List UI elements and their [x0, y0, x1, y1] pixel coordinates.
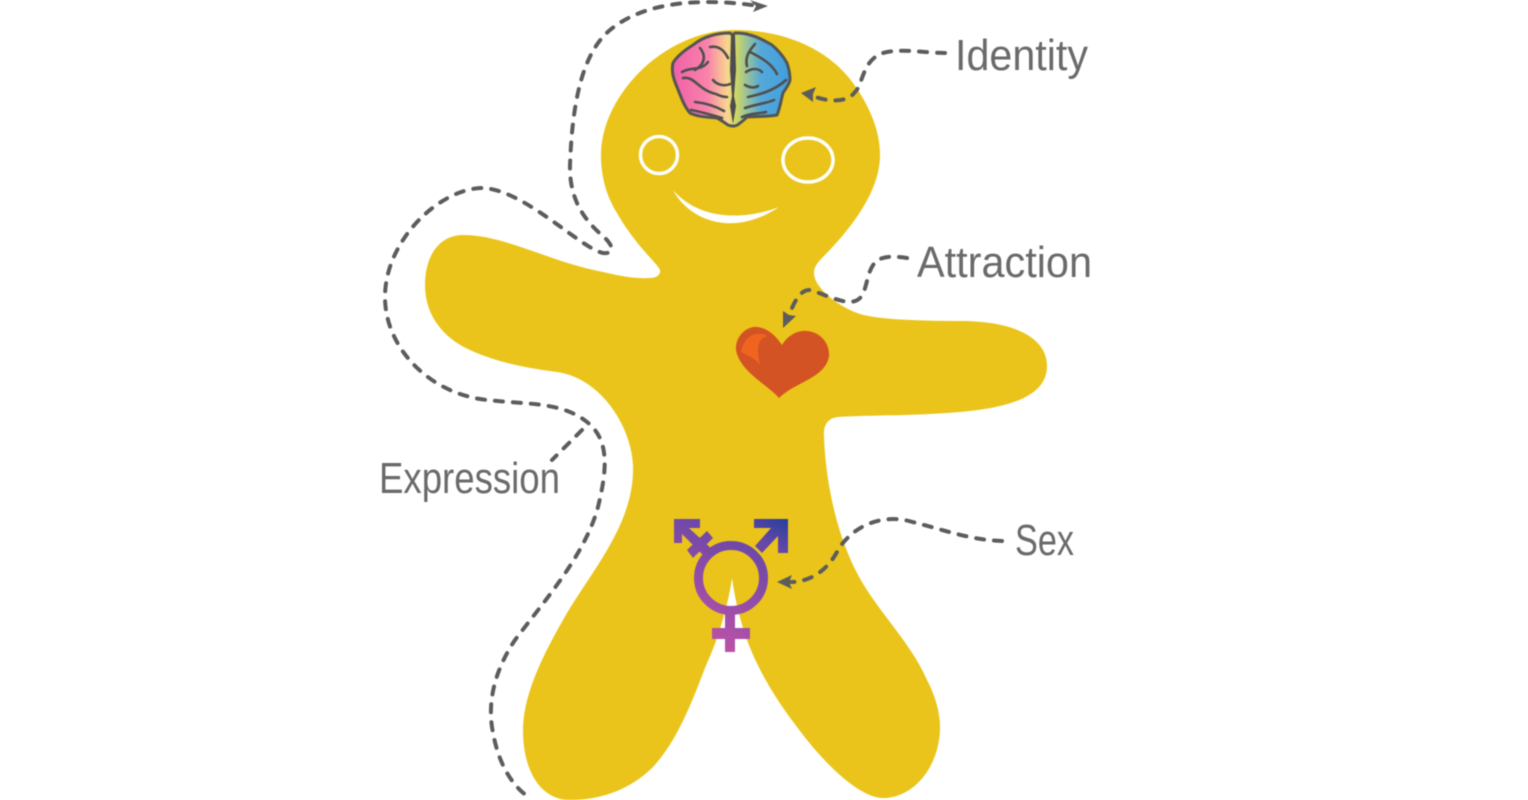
label: sex: Sex: [1015, 516, 1074, 565]
smile: [673, 190, 779, 223]
arrow: expression outline: [385, 0, 768, 798]
arrow: sex: [777, 519, 1002, 589]
icon: transgender symbol: [674, 519, 788, 652]
arrow: expression label connector: [552, 430, 582, 460]
label: identity: Identity: [955, 31, 1088, 80]
arrow: attraction: [783, 257, 907, 328]
label: expression: Expression: [379, 454, 560, 503]
right eye: [783, 138, 833, 182]
icon: heart: [736, 327, 829, 398]
icon: brain: [672, 33, 790, 126]
label: attraction: Attraction: [917, 238, 1092, 287]
gingerbread body: [425, 30, 1047, 800]
arrow: identity: [801, 51, 945, 102]
left eye: [640, 136, 678, 174]
